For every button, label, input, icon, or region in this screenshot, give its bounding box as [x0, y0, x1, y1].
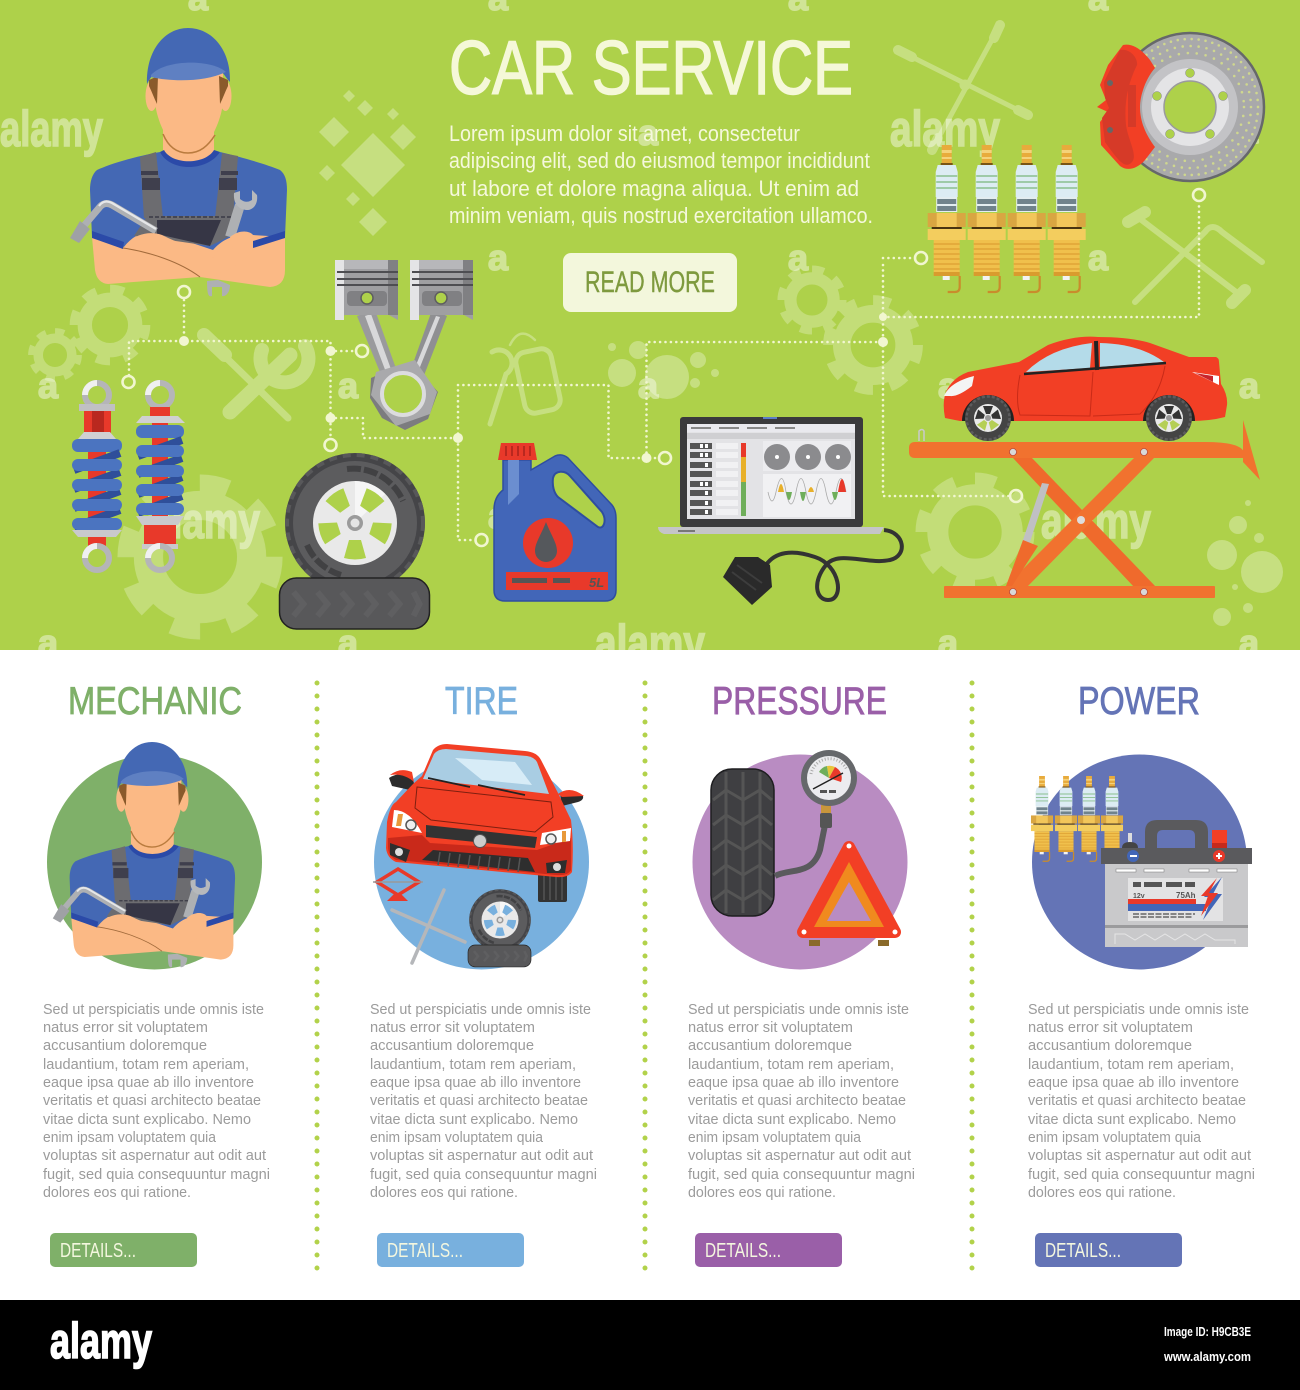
background decorative icons: a: [788, 237, 809, 278]
icon: mechanic: [70, 28, 287, 296]
text: pressure description: Sed ut perspiciatis unde omnis iste: [688, 1002, 909, 1018]
intro text: Lorem ipsum dolor sit amet, consectetur: [449, 121, 800, 146]
background decorative icons: a: [38, 622, 59, 663]
text: mechanic description: accusantium doloremque: [43, 1038, 207, 1054]
background decorative icons: a: [188, 242, 209, 283]
panel: pressure: [688, 680, 915, 1267]
panel: green hero background: [0, 0, 1300, 650]
icon: motor oil canister: [494, 443, 616, 601]
text: pressure description: voluptas sit aspernatur aut odit aut: [688, 1148, 911, 1164]
text: mechanic description: fugit, sed quia consequuntur magni: [43, 1167, 270, 1183]
icon: OBD cable: [723, 530, 902, 605]
text: tire description: natus error sit voluptatem: [370, 1020, 535, 1036]
text: pressure description: enim ipsam voluptatem quia: [688, 1130, 862, 1146]
text: power description: enim ipsam voluptatem quia: [1028, 1130, 1202, 1146]
icon: tire with alloy wheel: [280, 453, 430, 629]
text: power description: veritatis et quasi architecto beatae: [1028, 1093, 1246, 1109]
background decorative icons: alamy: [150, 493, 260, 549]
text: pressure description: fugit, sed quia consequuntur magni: [688, 1167, 915, 1183]
title: CAR SERVICE: [449, 26, 853, 111]
background decorative icons: alamy: [595, 615, 705, 671]
text: tire description: [370, 1002, 597, 1201]
heading: power: POWER: [1078, 680, 1200, 723]
panel: power: [1028, 680, 1255, 1267]
button: details: DETAILS...: [1045, 1240, 1121, 1262]
text: mechanic description: vitae dicta sunt explicabo. Nemo: [43, 1112, 251, 1128]
text: pressure description: natus error sit voluptatem: [688, 1020, 853, 1036]
illustration: spark plugs and battery: [1031, 754, 1252, 970]
button: details: DETAILS...: [60, 1240, 136, 1262]
text: power description: eaque ipsa quae ab illo inventore: [1028, 1075, 1239, 1091]
text: tire description: enim ipsam voluptatem quia: [370, 1130, 544, 1146]
footer bar: [0, 1300, 1300, 1390]
text: pressure description: vitae dicta sunt explicabo. Nemo: [688, 1112, 896, 1128]
background decorative icons: [0, 0, 1283, 671]
background decorative icons: a: [488, 237, 509, 278]
icon: car on lift: [909, 337, 1260, 598]
background decorative icons: a: [488, 495, 509, 536]
text: tire description: eaque ipsa quae ab illo inventore: [370, 1075, 581, 1091]
text: power description: vitae dicta sunt explicabo. Nemo: [1028, 1112, 1236, 1128]
text: tire description: veritatis et quasi architecto beatae: [370, 1093, 588, 1109]
illustration: tire, gauge and warning triangle: [692, 750, 908, 970]
background decorative icons: alamy: [1041, 493, 1151, 549]
intro text: ut labore et dolore magna aliqua. Ut enim ad: [449, 176, 859, 201]
text: mechanic description: voluptas sit aspernatur aut odit aut: [43, 1148, 266, 1164]
icon: brake disc and caliper: [1097, 33, 1264, 181]
footer image id: Image ID: H9CB3E: [1164, 1325, 1251, 1339]
illustration: car on jack with wheel: [373, 744, 589, 970]
illustration: spark plugs and battery: 75Ah: [1176, 891, 1196, 900]
text: power description: fugit, sed quia consequuntur magni: [1028, 1167, 1255, 1183]
background decorative icons: a: [1238, 110, 1259, 151]
text: tire description: fugit, sed quia consequuntur magni: [370, 1167, 597, 1183]
text: pressure description: eaque ipsa quae ab illo inventore: [688, 1075, 899, 1091]
text: mechanic description: enim ipsam voluptatem quia: [43, 1130, 217, 1146]
background decorative icons: alamy: [0, 101, 103, 157]
text: tire description: Sed ut perspiciatis unde omnis iste: [370, 1002, 591, 1018]
background decorative icons: a: [938, 365, 959, 406]
icon: spark plugs: [928, 145, 1086, 292]
button: read more: READ MORE: [585, 266, 715, 299]
background decorative icons: a: [938, 622, 959, 663]
icon: engine pistons: [335, 260, 473, 430]
panel: white info area: [0, 650, 1300, 1300]
footer url: www.alamy.com: [1163, 1350, 1251, 1364]
text: power description: natus error sit voluptatem: [1028, 1020, 1193, 1036]
background decorative icons: a: [638, 112, 659, 153]
text: mechanic description: eaque ipsa quae ab illo inventore: [43, 1075, 254, 1091]
text: tire description: vitae dicta sunt explicabo. Nemo: [370, 1112, 578, 1128]
dotted column dividers: [317, 683, 972, 1272]
text: pressure description: laudantium, totam rem aperiam,: [688, 1057, 894, 1073]
background decorative icons: a: [1088, 237, 1109, 278]
heading: pressure: PRESSURE: [712, 680, 887, 723]
button: read more: [563, 253, 737, 312]
intro text: adipiscing elit, sed do eiusmod tempor incididunt: [449, 148, 870, 173]
button: details: [1035, 1233, 1182, 1267]
background decorative icons: a: [788, 495, 809, 536]
text: mechanic description: dolores eos qui ratione.: [43, 1185, 191, 1201]
text: mechanic description: Sed ut perspiciatis unde omnis iste: [43, 1002, 264, 1018]
background decorative icons: a: [338, 365, 359, 406]
text: pressure description: [688, 1002, 915, 1201]
icon: motor oil canister: 5L: [589, 575, 604, 590]
button: details: DETAILS...: [387, 1240, 463, 1262]
text: power description: voluptas sit aspernatur aut odit aut: [1028, 1148, 1251, 1164]
background decorative icons: a: [338, 622, 359, 663]
button: details: [695, 1233, 842, 1267]
text: pressure description: veritatis et quasi architecto beatae: [688, 1093, 906, 1109]
text: mechanic description: [43, 1002, 270, 1201]
text: power description: laudantium, totam rem aperiam,: [1028, 1057, 1234, 1073]
text: pressure description: accusantium doloremque: [688, 1038, 852, 1054]
background decorative icons: a: [1239, 365, 1260, 406]
panel: mechanic: [43, 680, 270, 1267]
button: details: DETAILS...: [705, 1240, 781, 1262]
background decorative icons: a: [1239, 622, 1260, 663]
text: power description: dolores eos qui ratione.: [1028, 1185, 1176, 1201]
text: tire description: accusantium doloremque: [370, 1038, 534, 1054]
intro text: [449, 121, 873, 228]
text: power description: [1028, 1002, 1255, 1201]
icon: diagnostic laptop: [658, 417, 884, 534]
text: tire description: voluptas sit aspernatur aut odit aut: [370, 1148, 593, 1164]
text: pressure description: dolores eos qui ratione.: [688, 1185, 836, 1201]
text: mechanic description: laudantium, totam rem aperiam,: [43, 1057, 249, 1073]
footer logo: alamy: [50, 1313, 152, 1369]
text: mechanic description: natus error sit voluptatem: [43, 1020, 208, 1036]
illustration: mechanic in green circle: [47, 742, 262, 970]
text: power description: accusantium doloremque: [1028, 1038, 1192, 1054]
background decorative icons: a: [38, 365, 59, 406]
connector lines: [122, 189, 1205, 546]
button: details: [50, 1233, 197, 1267]
background decorative icons: alamy: [890, 101, 1000, 157]
panel: tire: [370, 680, 597, 1267]
text: mechanic description: veritatis et quasi architecto beatae: [43, 1093, 261, 1109]
text: tire description: dolores eos qui ratione.: [370, 1185, 518, 1201]
intro text: minim veniam, quis nostrud exercitation ullamco.: [449, 203, 873, 228]
heading: tire: TIRE: [445, 680, 518, 723]
icon: shock absorbers: [72, 383, 185, 570]
button: details: [377, 1233, 524, 1267]
background decorative icons: a: [638, 365, 659, 406]
heading: mechanic: MECHANIC: [68, 680, 242, 723]
text: tire description: laudantium, totam rem aperiam,: [370, 1057, 576, 1073]
illustration: spark plugs and battery: 12v: [1133, 893, 1145, 900]
text: power description: Sed ut perspiciatis unde omnis iste: [1028, 1002, 1249, 1018]
